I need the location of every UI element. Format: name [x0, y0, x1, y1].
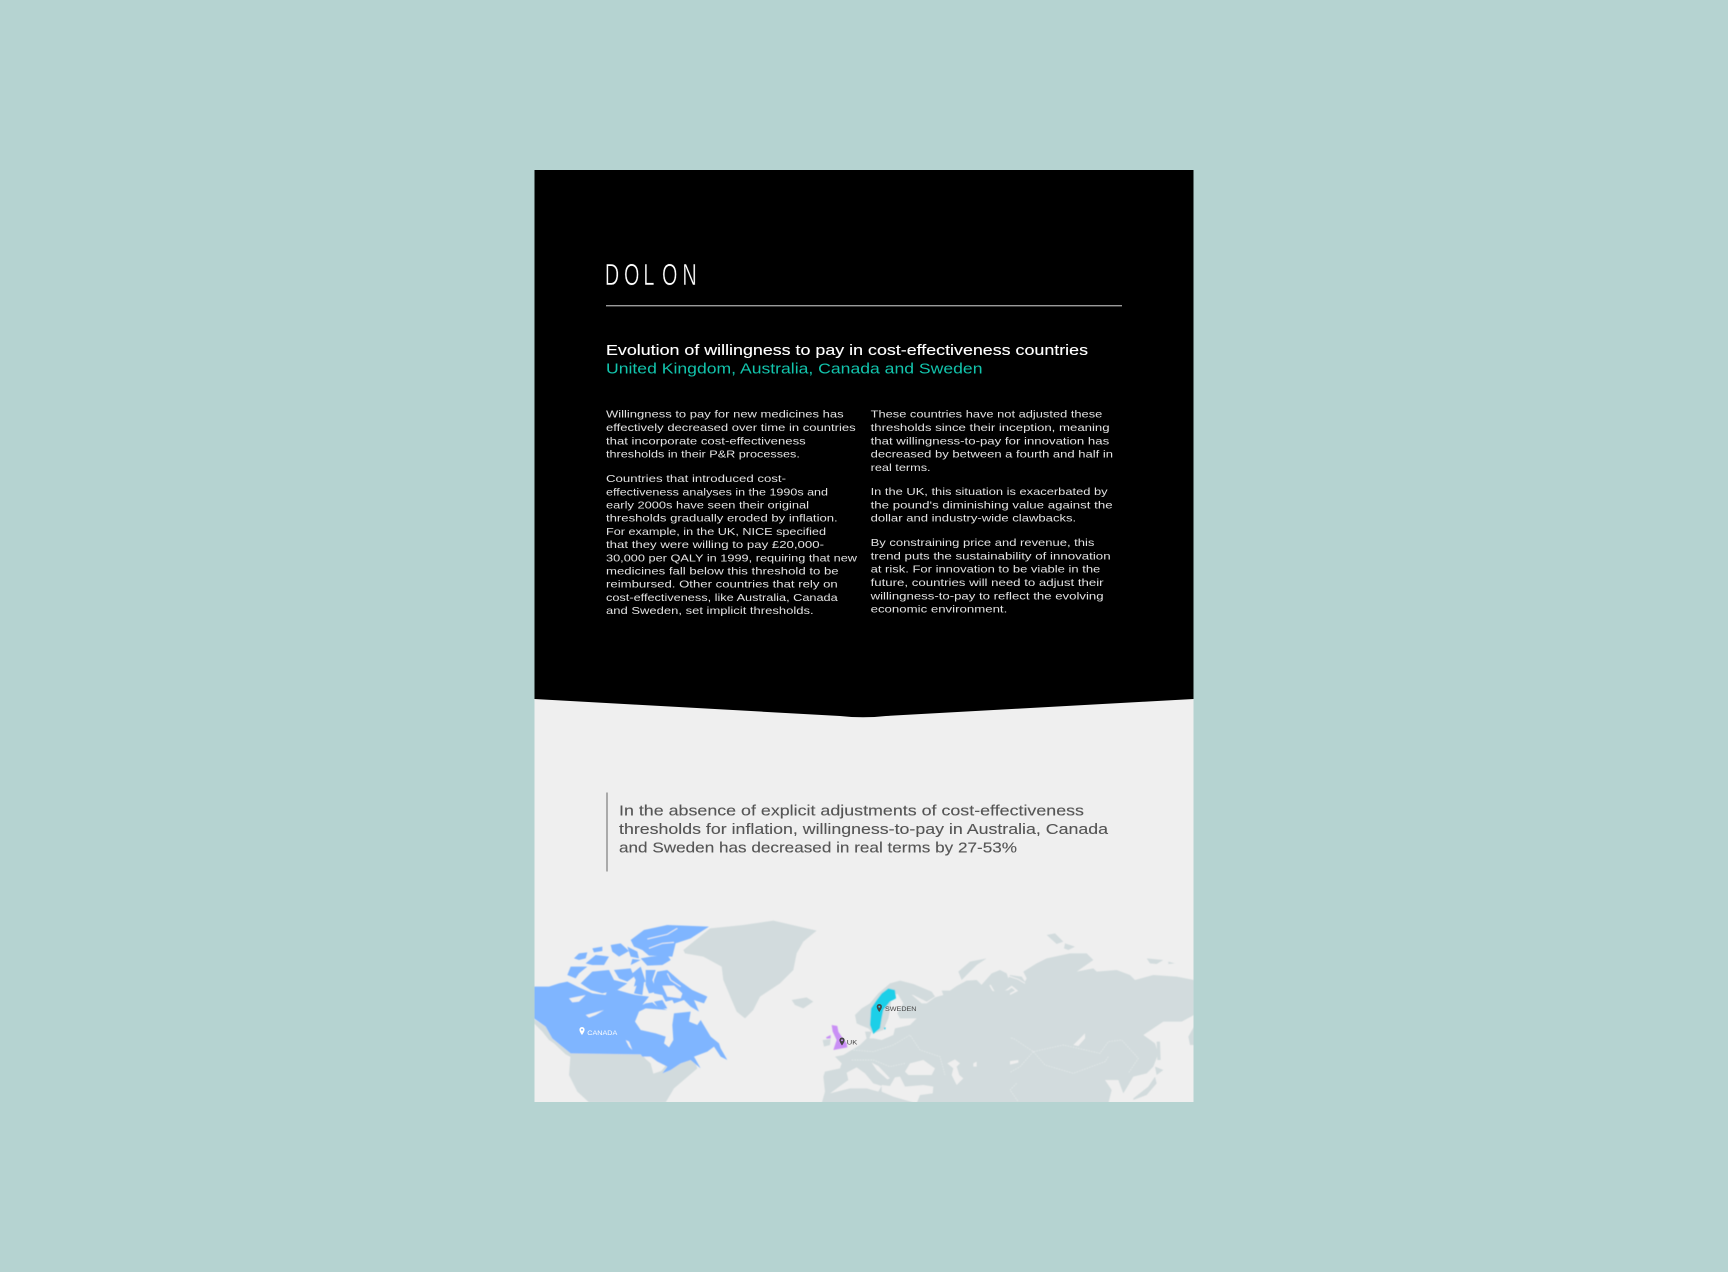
text block: right column: the pound's diminishing value against the	[871, 500, 1113, 511]
text block: left column: Countries that introduced cost-	[606, 474, 786, 485]
text block: right column: In the UK, this situation is exacerbated by	[871, 487, 1109, 498]
text block: left column: and Sweden, set implicit thresholds.	[606, 606, 814, 617]
text block: right column: economic environment.	[871, 605, 1007, 616]
map: Greenland and Iceland	[683, 921, 817, 1018]
text block: left column: early 2000s have seen their original	[606, 501, 809, 511]
text block: left column: reimbursed. Other countries that rely on	[606, 580, 838, 591]
text block: right column: willingness-to-pay to reflect the evolving	[869, 591, 1104, 602]
text block: right column: future, countries will need to adjust their	[871, 578, 1104, 589]
text block: right column: These countries have not adjusted these	[871, 410, 1103, 421]
map: Canada	[534, 925, 727, 1073]
text block: left column: thresholds gradually eroded by inflation.	[606, 514, 838, 525]
text block: left column: medicines fall below this threshold to be	[606, 566, 839, 577]
text block: left column: effectively decreased over time in countries	[606, 423, 856, 434]
panel: light lower section	[534, 690, 1194, 1102]
text block: left column: 30,000 per QALY in 1999, requiring that new	[606, 553, 858, 564]
infographic page	[534, 170, 1194, 1102]
label: Sweden	[876, 1004, 916, 1012]
subtitle: United Kingdom, Australia, Canada and Sweden	[606, 362, 982, 378]
text block: left column: cost-effectiveness, like Australia, Canada	[606, 593, 838, 604]
text block: right column: decreased by between a fourth and half in	[871, 450, 1113, 461]
text block: right column: that willingness-to-pay for innovation has	[871, 436, 1109, 447]
label: Canada	[579, 1027, 618, 1035]
text block: right column: trend puts the sustainability of innovation	[871, 551, 1111, 562]
text block: left column: thresholds in their P&R processes.	[606, 450, 800, 461]
callout: key finding	[606, 792, 1109, 872]
world map	[534, 921, 1195, 1103]
label: UK	[839, 1038, 858, 1046]
title: Evolution of willingness to pay in cost-effectiveness countries	[606, 343, 1088, 359]
text block: right column: at risk. For innovation to be viable in the	[871, 565, 1101, 576]
callout: key finding: and Sweden has decreased in real terms by 27-53%	[619, 840, 1017, 857]
map: Sweden	[870, 988, 896, 1034]
text block: right column	[869, 410, 1113, 616]
label: UK: UK	[847, 1039, 858, 1046]
header rule	[606, 305, 1122, 306]
map: United States and Alaska	[534, 1019, 697, 1102]
text block: right column: real terms.	[871, 463, 931, 474]
text block: left column: effectiveness analyses in the 1990s and	[606, 487, 828, 498]
callout: key finding: thresholds for inflation, willingness-to-pay in Australia, Canada	[619, 821, 1109, 838]
text block: right column: By constraining price and revenue, this	[871, 538, 1094, 549]
label: Canada: CANADA	[587, 1030, 618, 1037]
text block: right column: dollar and industry-wide clawbacks.	[871, 514, 1076, 525]
callout: key finding: In the absence of explicit adjustments of cost-effectiveness	[619, 803, 1084, 820]
text block: left column: that incorporate cost-effectiveness	[606, 436, 806, 447]
logo: DOLON	[605, 256, 697, 292]
text block: left column: For example, in the UK, NICE specified	[606, 527, 826, 538]
text block: left column: that they were willing to pay £20,000-	[606, 540, 824, 551]
panel: black header	[534, 170, 1194, 717]
map: Canadian lakes and bays	[569, 928, 682, 1050]
map: United Kingdom	[826, 1025, 847, 1050]
label: Sweden: SWEDEN	[885, 1006, 917, 1013]
text block: left column	[606, 410, 858, 617]
map: Russia and Asia	[980, 933, 1195, 1103]
text block: right column: thresholds since their inception, meaning	[871, 423, 1110, 434]
text block: left column: Willingness to pay for new medicines has	[606, 410, 844, 421]
map: Europe and Scandinavia	[822, 958, 1010, 1103]
